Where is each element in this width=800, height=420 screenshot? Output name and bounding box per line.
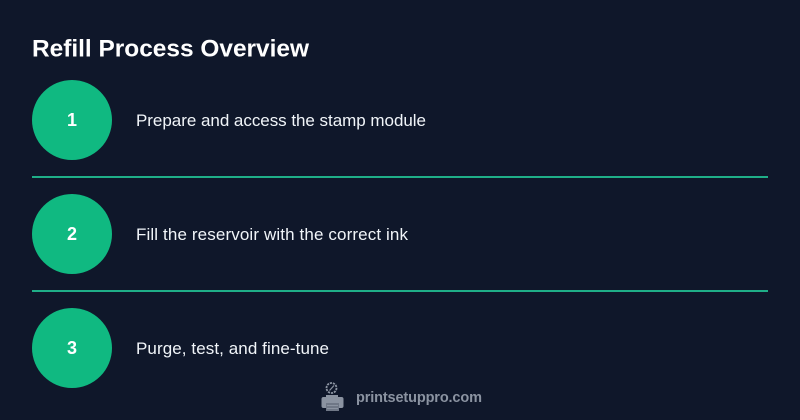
icon: printer with gear: [322, 383, 344, 411]
step 1 number badge: 1: [67, 110, 77, 130]
step 3: [32, 308, 329, 388]
title: Refill Process Overview: [32, 36, 309, 62]
step 2: [32, 194, 408, 274]
footer watermark: [322, 383, 482, 411]
step 3 label: Purge, test, and fine-tune: [136, 339, 329, 358]
step 1: [32, 80, 426, 160]
step 3 number badge: 3: [67, 338, 77, 358]
step 2 number badge: 2: [67, 224, 77, 244]
step 2 number badge: [32, 194, 112, 274]
website text: printsetuppro.com: [356, 390, 482, 406]
step 1 label: Prepare and access the stamp module: [136, 111, 426, 130]
step 1 number badge: [32, 80, 112, 160]
step 2 label: Fill the reservoir with the correct ink: [136, 225, 408, 244]
step 3 number badge: [32, 308, 112, 388]
